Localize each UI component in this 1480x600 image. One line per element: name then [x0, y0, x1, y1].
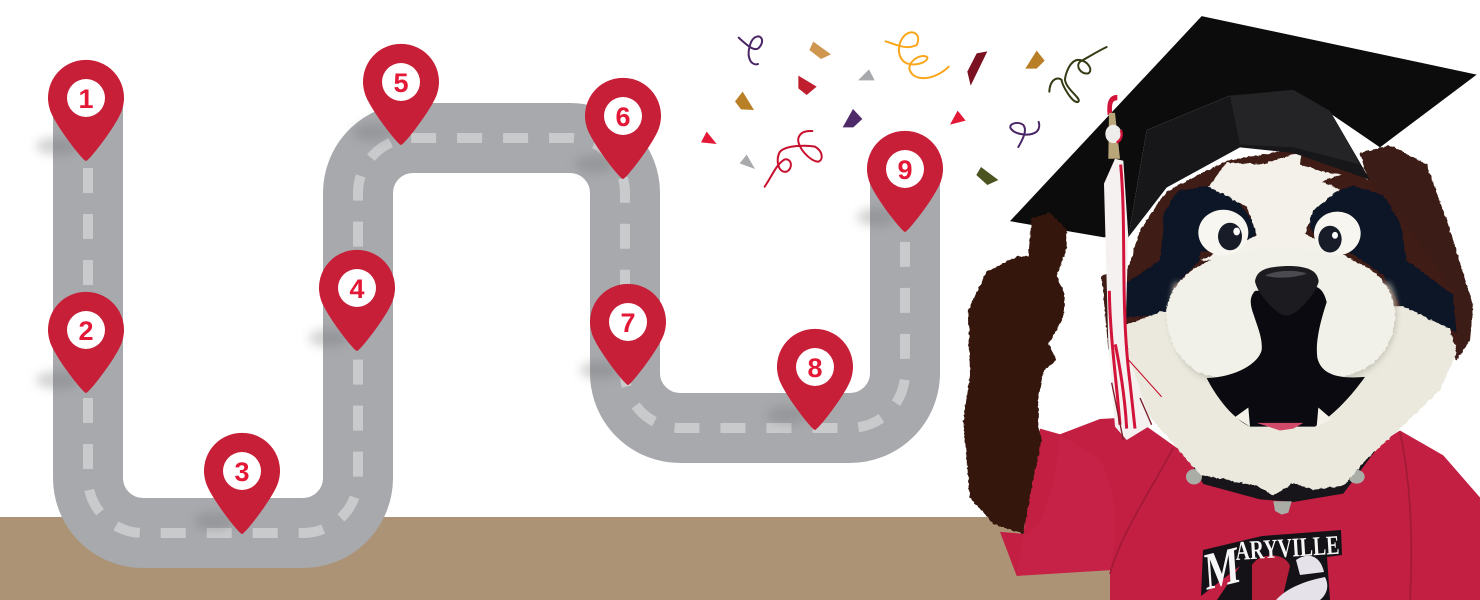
pin 5 — [353, 44, 439, 145]
pin 1: 1 — [78, 84, 94, 114]
muzzle shadow — [1168, 283, 1397, 381]
winding road — [88, 100, 905, 533]
pin 3: 3 — [234, 457, 250, 487]
pin 4 — [309, 250, 395, 351]
white jowls — [1125, 306, 1457, 496]
pin 9 — [857, 131, 943, 232]
pin 4: 4 — [349, 274, 365, 304]
pin 5: 5 — [393, 68, 409, 98]
white forehead blaze — [1200, 152, 1353, 260]
tassel — [1104, 98, 1162, 440]
navy eye patches — [1127, 186, 1457, 333]
pin 9: 9 — [897, 155, 913, 185]
pin 6: 6 — [615, 102, 631, 132]
confetti — [701, 32, 1107, 187]
mascot body and head — [963, 16, 1480, 600]
pin 3 — [194, 433, 280, 534]
eyes — [1198, 210, 1361, 256]
teeth and tongue — [1235, 408, 1332, 430]
open mouth — [1207, 287, 1365, 427]
pin 7: 7 — [620, 308, 636, 338]
shirt logo — [1201, 530, 1342, 600]
shirt logo: ARYVILLE — [1235, 530, 1340, 566]
mascot in graduation cap — [963, 16, 1480, 600]
cap band — [1128, 90, 1370, 237]
graduation cap board — [1010, 16, 1477, 237]
pin 2 — [36, 292, 124, 393]
nose — [1255, 266, 1319, 316]
pin 7 — [580, 284, 666, 385]
head fur base — [1102, 149, 1460, 352]
pin 2: 2 — [78, 316, 94, 346]
pin 6 — [575, 78, 661, 179]
collar and studs — [1186, 440, 1383, 515]
arm and raised finger — [963, 212, 1067, 534]
ground band — [0, 517, 1112, 600]
shirt logo: M — [1203, 534, 1241, 600]
muzzle — [1167, 250, 1395, 377]
pin 1 — [36, 60, 124, 161]
ear — [1360, 145, 1473, 360]
shirt — [1000, 417, 1480, 600]
pin 8: 8 — [807, 353, 823, 383]
pin 8 — [767, 329, 853, 430]
